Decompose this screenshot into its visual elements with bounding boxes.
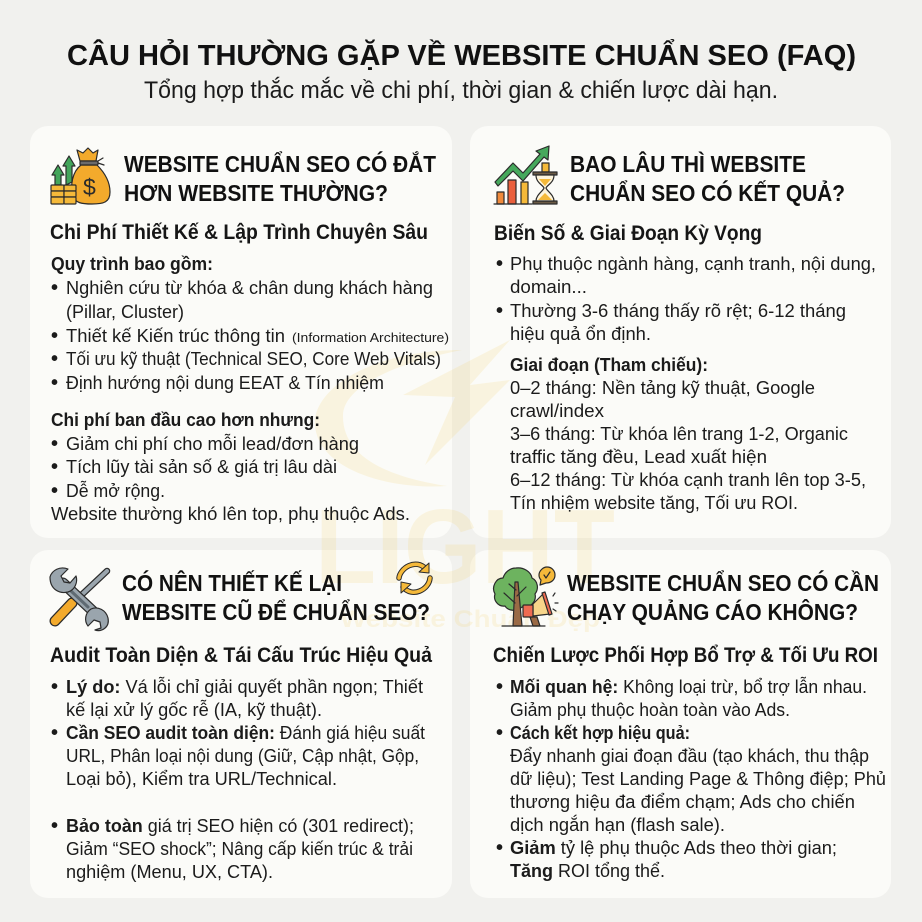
subheading: ads: Chiến Lược Phối Hợp Bổ Trợ & Tối Ưu ROI [493,644,878,667]
text block: redesign reasons: URL, Phân loại nội dung (Giữ, Cập nhật, Gộp, [66,745,419,766]
text block: stages: traffic tăng đều, Lead xuất hiện [510,446,767,467]
subheading: redesign: Audit Toàn Diện & Tái Cấu Trúc Hiệu Quả [50,644,432,667]
icon: money bag with coins [51,148,110,204]
panel: redesign [30,550,452,898]
text block: redesign reasons: kế lại xử lý gốc rễ (IA, kỹ thuật). [66,699,322,720]
icon: money bag with coins: $ [83,174,96,200]
panel: timeline [470,126,891,538]
heading: redesign: CÓ NÊN THIẾT KẾ LẠI [122,569,342,596]
text block: stages: 0–2 tháng: Nền tảng kỹ thuật, Google [510,377,815,398]
icon: tree and megaphone [494,567,558,626]
text block: process: • [51,277,58,299]
text block: stages: Giai đoạn (Tham chiếu): [510,354,708,375]
text block: ads combination: Cách kết hợp hiệu quả: [510,722,690,743]
text block: process: (Information Architecture) [292,331,449,345]
text block: ads relationship: • [496,676,503,698]
text block: benefits [51,409,410,524]
text block: stages [510,354,866,513]
text block: preservation [51,815,414,882]
text block: benefits: Chi phí ban đầu cao hơn nhưng: [51,409,320,430]
watermark logo: LIGHT [315,488,615,606]
watermark logo [315,340,615,633]
text block: redesign reasons: • [51,722,58,744]
text block: process: • [51,372,58,394]
subheading: timeline: Biến Số & Giai Đoạn Kỳ Vọng [494,222,762,245]
title: CÂU HỎI THƯỜNG GẶP VỀ WEBSITE CHUẨN SEO (FAQ) [67,38,856,72]
heading: ads: WEBSITE CHUẨN SEO CÓ CẦN [567,569,879,596]
text block: redesign reasons: Loại bỏ), Kiểm tra URL/Technical. [66,768,337,789]
text block: stages: Tín nhiệm website tăng, Tối ưu ROI. [510,492,798,513]
text block: process: • [51,348,58,370]
icon: refresh arrows [399,563,430,593]
icon: growth chart with hourglass [494,146,557,204]
text block: redesign reasons: Cần SEO audit toàn diện: Đánh giá hiệu suất [66,722,425,743]
text block: ads combination: Đẩy nhanh giai đoạn đầu (tạo khách, thu thập [510,745,869,766]
text block: process: Thiết kế Kiến trúc thông tin [66,325,285,346]
text block: redesign reasons: • [51,676,58,698]
text block: ads combination: • [496,722,503,744]
text block: benefits: Giảm chi phí cho mỗi lead/đơn hàng [66,433,359,454]
text block: variables: domain... [510,276,587,297]
text block: preservation: Giảm “SEO shock”; Nâng cấp kiến trúc & trải [66,838,413,859]
heading: cost [124,150,436,206]
heading: cost: WEBSITE CHUẨN SEO CÓ ĐẮT [124,150,436,177]
text block: variables: • [496,253,503,275]
text block: benefits: Dễ mở rộng. [66,480,165,501]
text block: benefits: • [51,480,58,502]
heading: timeline [570,150,845,206]
text block: stages: crawl/index [510,400,604,421]
text block: preservation: Bảo toàn giá trị SEO hiện có (301 redirect); [66,815,414,836]
subheading: cost: Chi Phí Thiết Kế & Lập Trình Chuyên Sâu [50,221,428,244]
text block: ads combination [496,722,886,835]
text block: ads combination: thương hiệu đa điểm chạm; Ads cho chiến [510,791,855,812]
text block: process: • [51,325,58,347]
heading: cost: HƠN WEBSITE THƯỜNG? [124,179,388,206]
text block: preservation: • [51,815,58,837]
text block: ads outcome: • [496,837,503,859]
text block: stages: 6–12 tháng: Từ khóa cạnh tranh lên top 3-5, [510,469,866,490]
text block: process: Định hướng nội dung EEAT & Tín nhiệm [66,372,384,393]
text block: stages: 3–6 tháng: Từ khóa lên trang 1-2, Organic [510,423,848,444]
text block: process: (Pillar, Cluster) [66,301,184,322]
heading: ads: CHẠY QUẢNG CÁO KHÔNG? [567,597,858,625]
text block: redesign reasons: Lý do: Vá lỗi chỉ giải quyết phần ngọn; Thiết [66,676,423,697]
text block: process: Tối ưu kỹ thuật (Technical SEO, Core Web Vitals) [66,348,441,369]
text block: ads relationship: Mối quan hệ: Không loại trừ, bổ trợ lẫn nhau. [510,676,867,697]
text block: variables: Thường 3-6 tháng thấy rõ rệt; 6-12 tháng [510,300,846,321]
text block: benefits: Tích lũy tài sản số & giá trị lâu dài [66,456,337,477]
text block: variables: Phụ thuộc ngành hàng, cạnh tranh, nội dung, [510,253,876,274]
heading: redesign: WEBSITE CŨ ĐỂ CHUẨN SEO? [122,598,430,625]
text block: ads combination: dịch ngắn hạn (flash sale). [510,814,725,835]
text block: variables: • [496,300,503,322]
text block: benefits: Website thường khó lên top, phụ thuộc Ads. [51,503,410,524]
panel: cost [30,126,452,538]
heading: ads [567,569,879,625]
text block: ads relationship: Giảm phụ thuộc hoàn toàn vào Ads. [510,699,790,720]
icon: wrench and screwdriver [50,568,108,630]
heading: timeline: BAO LÂU THÌ WEBSITE [570,150,806,177]
heading: timeline: CHUẨN SEO CÓ KẾT QUẢ? [570,178,845,206]
text block: ads outcome: Giảm tỷ lệ phụ thuộc Ads theo thời gian; [510,837,837,858]
text block: ads outcome [496,837,837,881]
heading: redesign [122,569,430,625]
subtitle: Tổng hợp thắc mắc về chi phí, thời gian & chiến lược dài hạn. [144,77,778,104]
text block: ads combination: dữ liệu); Test Landing Page & Thông điệp; Phủ [510,768,886,789]
text block: variables [496,253,876,344]
watermark logo: Website Chuẩn Đẹp [340,606,600,633]
text block: process: Nghiên cứu từ khóa & chân dung khách hàng [66,277,433,298]
text block: ads outcome: Tăng ROI tổng thể. [510,860,665,881]
panel: ads [470,550,891,898]
text block: variables: hiệu quả ổn định. [510,323,651,344]
text block: process [51,253,449,394]
text block: benefits: • [51,433,58,455]
text block: preservation: nghiệm (Menu, UX, CTA). [66,861,273,882]
text block: process: Quy trình bao gồm: [51,253,213,274]
text block: ads relationship [496,676,867,720]
text block: redesign reasons [51,676,425,789]
text block: benefits: • [51,456,58,478]
